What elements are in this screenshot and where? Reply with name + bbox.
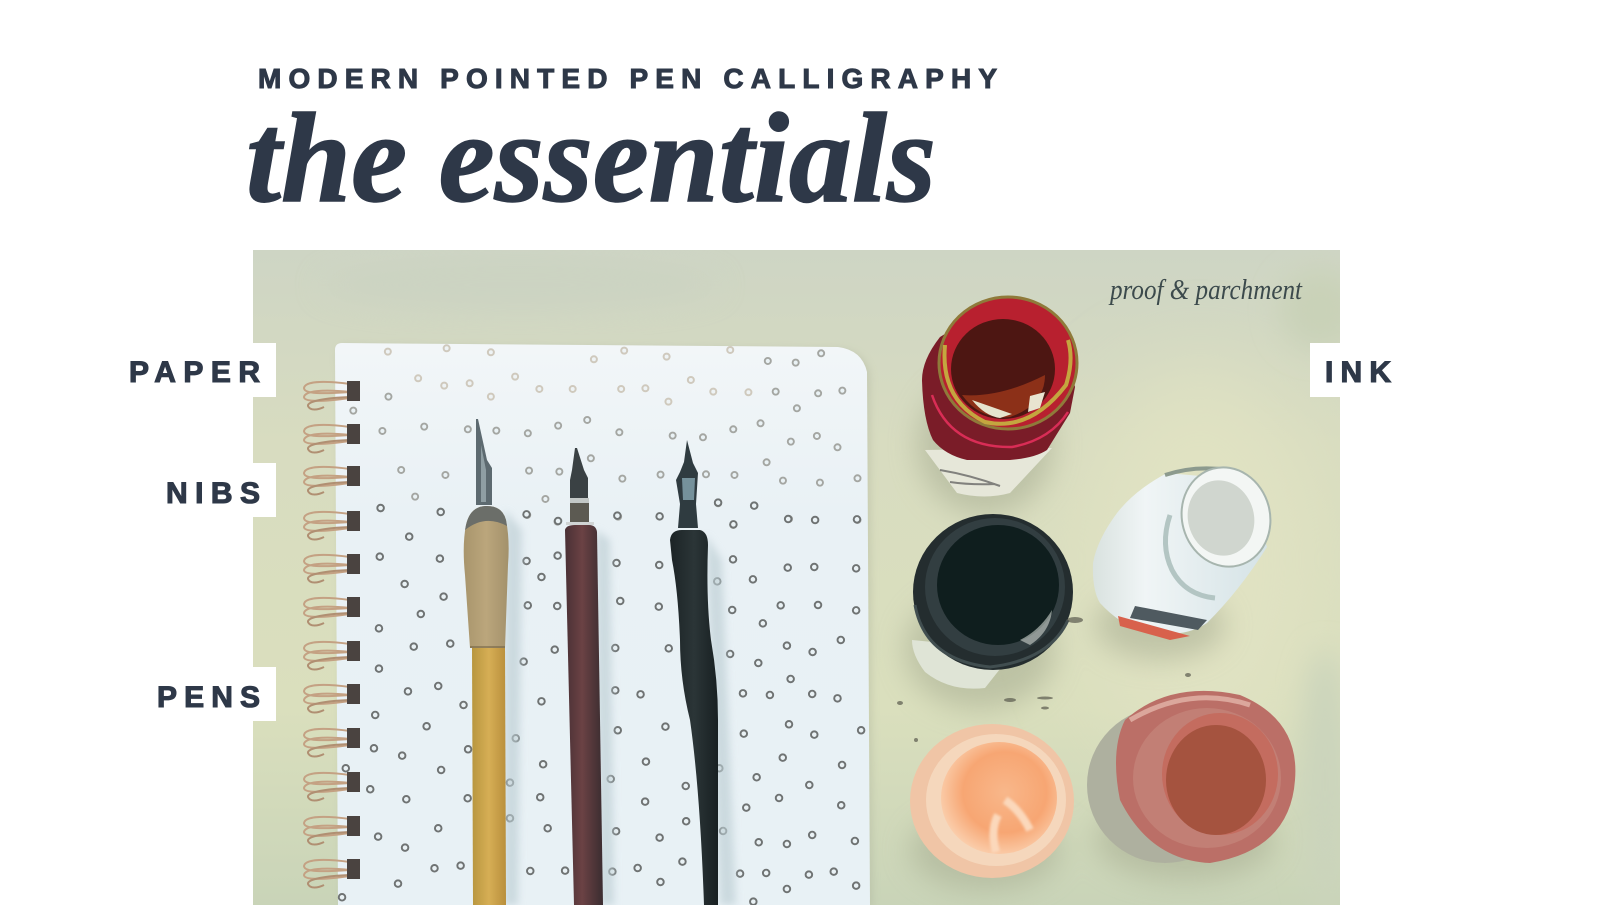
pen: cork grip with wooden holder — [464, 419, 509, 905]
pen: burgundy straight holder — [565, 448, 603, 905]
ink jar shadows — [905, 375, 1275, 890]
notebook spiral binding — [304, 381, 360, 888]
ink jar: black — [912, 514, 1073, 689]
label: PAPER: PAPER — [129, 356, 260, 389]
notebook: upper dots — [353, 353, 858, 525]
label: PENS — [157, 667, 276, 721]
ink jar: red — [922, 297, 1077, 496]
heading: series title: MODERN POINTED PEN CALLIGRAPHY — [258, 63, 997, 94]
label: INK — [1310, 343, 1391, 397]
pen: black oblique holder — [670, 440, 718, 905]
ink splatter — [897, 617, 1191, 742]
label: PENS: PENS — [157, 681, 260, 714]
notebook — [335, 343, 873, 905]
label: INK: INK — [1325, 356, 1391, 389]
photo: pens, notebook and ink jars — [253, 250, 1360, 905]
label: PAPER — [129, 343, 276, 397]
ink jar: white — [1093, 457, 1281, 640]
infographic canvas — [130, 68, 1392, 905]
photo: desk surface — [253, 250, 1360, 905]
title: the essentials: the essentials — [246, 87, 936, 229]
notebook: pale foil dots near the top — [388, 348, 748, 402]
ink jar: pink powder — [1087, 691, 1295, 863]
ink jar: orange — [910, 724, 1074, 878]
label: NIBS: NIBS — [166, 477, 260, 510]
logo: proof & parchment: proof & parchment — [1108, 274, 1303, 306]
label: NIBS — [166, 463, 276, 517]
notebook: lower dots — [342, 503, 861, 902]
pen shadows — [504, 510, 736, 905]
